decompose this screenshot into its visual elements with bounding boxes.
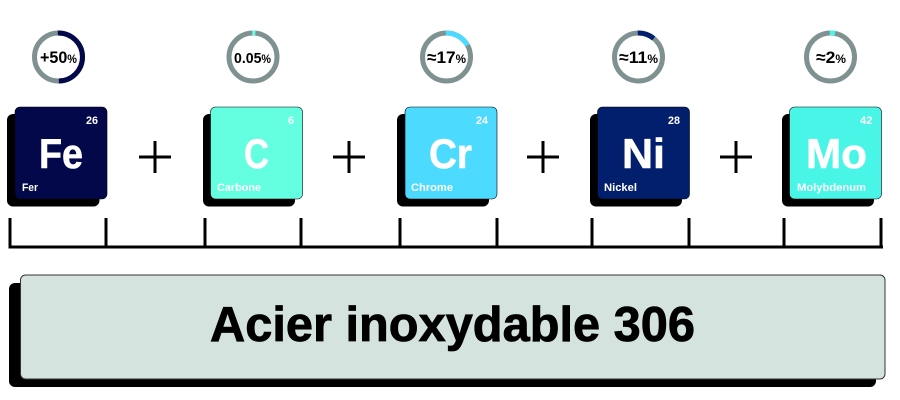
element tile: C: C — [244, 130, 269, 177]
element tile: Ni: 28 — [668, 115, 680, 127]
ring: iron +50%: +50% — [40, 48, 77, 67]
element tile: Cr: Chrome — [411, 182, 453, 194]
ring: chromium 17% — [422, 33, 470, 81]
element tile: Ni: Ni — [622, 130, 665, 177]
element tile: Fe: Fer — [22, 182, 39, 194]
element tile: C — [203, 107, 302, 206]
ring: iron +50% — [34, 33, 82, 81]
element tile: Ni — [590, 107, 690, 206]
plus sign — [720, 141, 752, 173]
plus sign — [333, 141, 365, 173]
element tile: Fe: Fe — [39, 130, 83, 177]
ring: nickel 11% — [614, 33, 662, 81]
ring: carbon 0.05% — [229, 33, 277, 81]
plus sign — [139, 141, 171, 173]
ring: molybdenum 2%: ≈2% — [816, 48, 846, 67]
element tile: Mo: Mo — [806, 130, 867, 177]
banner: alloy name: Acier inoxydable 306 — [210, 298, 695, 352]
ring: molybdenum 2% — [806, 33, 854, 81]
banner: alloy name — [9, 275, 885, 387]
ring: nickel 11%: ≈11% — [619, 48, 658, 67]
element tile: Ni: Nickel — [604, 182, 637, 194]
element tile: Mo — [782, 107, 882, 206]
element tile: Cr — [397, 107, 497, 206]
element tile: Cr: 24 — [476, 115, 489, 127]
element tile: Cr: Cr — [429, 130, 472, 177]
element tile: Mo: Molybdenum — [797, 182, 866, 194]
element tile: C: 6 — [288, 115, 294, 127]
element tile: Fe: 26 — [86, 115, 98, 127]
element tile: Fe — [7, 107, 107, 206]
ring: carbon 0.05%: 0.05% — [234, 50, 271, 67]
ring: chromium 17%: ≈17% — [427, 48, 466, 67]
element tile: Mo: 42 — [860, 115, 872, 127]
bracket connecting elements to the alloy — [8, 218, 883, 248]
element tile: C: Carbone — [217, 182, 261, 194]
plus sign — [527, 141, 559, 173]
